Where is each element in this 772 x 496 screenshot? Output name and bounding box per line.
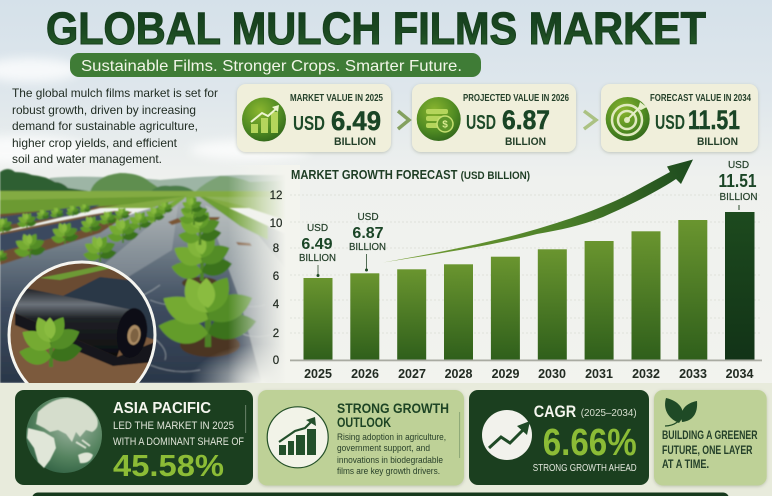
panel: Asia Pacific: ASIA PACIFIC bbox=[113, 400, 211, 417]
panel: CAGR: STRONG GROWTH AHEAD bbox=[533, 463, 637, 474]
axis labels: 0 bbox=[273, 355, 279, 367]
film ground bbox=[0, 197, 300, 383]
year labels: 2032 bbox=[632, 367, 660, 381]
bar chart bbox=[270, 190, 762, 381]
callout: 2034 value: USD bbox=[728, 160, 749, 171]
panel: Asia Pacific: LED THE MARKET IN 2025 bbox=[113, 420, 234, 432]
panel: strong growth outlook: government support, and bbox=[337, 443, 430, 453]
callout: 2026 value: USD bbox=[357, 212, 379, 223]
panel: CAGR bbox=[469, 390, 649, 485]
card: projected value 2026: BILLION bbox=[505, 136, 546, 148]
year labels: 2026 bbox=[351, 367, 379, 381]
intro text: soil and water management. bbox=[12, 152, 162, 166]
year labels: 2034 bbox=[726, 367, 753, 381]
panel: CAGR: (2025–2034) bbox=[581, 408, 637, 419]
bottom bar bbox=[32, 492, 729, 496]
bars bbox=[304, 212, 754, 360]
card: forecast value 2034: 11.51 bbox=[688, 105, 740, 135]
subtitle banner: Sustainable Films. Stronger Crops. Smarter Future. bbox=[81, 58, 462, 75]
callout: 2025 value bbox=[299, 223, 336, 277]
film lanes and soil strips bbox=[0, 205, 120, 232]
arrow: chevron 2 bbox=[584, 111, 596, 129]
year labels: 2033 bbox=[679, 367, 707, 381]
panel: strong growth outlook bbox=[258, 390, 464, 486]
year labels: 2029 bbox=[492, 367, 519, 381]
footer band background bbox=[0, 383, 772, 496]
panel: Asia Pacific: WITH A DOMINANT SHARE OF bbox=[113, 436, 244, 448]
intro text bbox=[12, 86, 218, 166]
axis labels: 6 bbox=[273, 271, 279, 283]
intro text: demand for sustainable agriculture, bbox=[12, 119, 198, 133]
callout: 2034 value: BILLION bbox=[720, 192, 758, 203]
panel: strong growth outlook: OUTLOOK bbox=[337, 415, 391, 430]
axis labels: 2 bbox=[273, 328, 279, 340]
icon: globe bbox=[26, 397, 102, 473]
axis labels: 8 bbox=[273, 243, 279, 255]
card: projected value 2026: 6.87 bbox=[502, 105, 550, 135]
year labels bbox=[304, 367, 753, 381]
clouds bbox=[0, 58, 310, 164]
callout: 2026 value bbox=[349, 212, 386, 272]
card: market value 2025: USD bbox=[293, 113, 325, 135]
icon: outlook chart bbox=[267, 407, 328, 468]
arrow: growth trend bbox=[383, 160, 693, 262]
callout: 2025 value: USD bbox=[307, 223, 328, 234]
year labels: 2031 bbox=[585, 367, 613, 381]
icon: trend arrow bbox=[482, 410, 532, 460]
panel: strong growth outlook: innovations in biodegradable bbox=[337, 455, 443, 465]
card: market value 2025: 6.49 bbox=[331, 106, 381, 136]
card: market value 2025: BILLION bbox=[334, 136, 376, 148]
soil patches bbox=[168, 217, 252, 246]
chart heading: MARKET GROWTH FORECAST (USD BILLION) bbox=[291, 168, 530, 182]
axis labels: 12 bbox=[270, 190, 282, 202]
subtitle banner bbox=[70, 53, 481, 77]
inset: film roll bbox=[8, 260, 156, 383]
year labels: 2027 bbox=[398, 367, 426, 381]
panel: strong growth outlook: Rising adoption in agriculture, bbox=[337, 432, 446, 442]
green field bbox=[0, 191, 300, 208]
panel: strong growth outlook: STRONG GROWTH bbox=[337, 401, 449, 416]
title: GLOBAL MULCH FILMS MARKET bbox=[46, 3, 706, 54]
right fade bbox=[228, 165, 286, 383]
year labels: 2030 bbox=[538, 367, 566, 381]
icon: coins: $ bbox=[442, 120, 448, 130]
crop rows bbox=[0, 196, 268, 348]
card: forecast value 2034: BILLION bbox=[697, 136, 738, 148]
intro text: The global mulch films market is set for bbox=[12, 86, 218, 100]
icon: coins bbox=[417, 97, 461, 141]
card: market value 2025: MARKET VALUE IN 2025 bbox=[290, 93, 383, 104]
callout: 2025 value: BILLION bbox=[299, 253, 336, 264]
callout: 2026 value: 6.87 bbox=[352, 225, 384, 242]
intro text: higher crop yields, and efficient bbox=[12, 136, 178, 150]
icon: leaves bbox=[665, 398, 697, 426]
intro text: robust growth, driven by increasing bbox=[12, 103, 196, 117]
tree line bbox=[0, 169, 300, 192]
axis labels: 4 bbox=[273, 299, 280, 311]
panel: greener future: AT A TIME. bbox=[662, 459, 709, 471]
panel: greener future bbox=[654, 390, 767, 486]
panel: Asia Pacific bbox=[15, 390, 253, 485]
axis labels bbox=[270, 190, 282, 367]
panel: strong growth outlook: films are key growth drivers. bbox=[337, 466, 440, 476]
card: forecast value 2034: USD bbox=[655, 112, 685, 134]
card: market value 2025 bbox=[237, 84, 391, 152]
panel: Asia Pacific: 45.58% bbox=[113, 448, 224, 483]
panel: CAGR: CAGR bbox=[534, 402, 576, 421]
axis labels: 10 bbox=[270, 218, 282, 230]
callout: 2026 value: BILLION bbox=[349, 242, 386, 253]
arrow: chevron 1 bbox=[398, 111, 409, 129]
panel: CAGR: 6.66% bbox=[543, 422, 637, 464]
photo: mulch film field bbox=[0, 168, 283, 383]
year labels: 2028 bbox=[445, 367, 472, 381]
card: projected value 2026 bbox=[412, 84, 576, 152]
callout: 2034 value: 11.51 bbox=[718, 171, 756, 191]
card: forecast value 2034 bbox=[601, 84, 758, 152]
callout: 2025 value: 6.49 bbox=[301, 236, 333, 253]
card: projected value 2026: PROJECTED VALUE IN 2026 bbox=[463, 93, 569, 104]
card: projected value 2026: USD bbox=[466, 112, 496, 134]
film highlights bbox=[104, 206, 280, 374]
year labels: 2025 bbox=[304, 367, 332, 381]
callout: 2034 value bbox=[718, 160, 758, 210]
icon: growth chart bbox=[242, 98, 286, 142]
icon: target bbox=[606, 97, 650, 141]
